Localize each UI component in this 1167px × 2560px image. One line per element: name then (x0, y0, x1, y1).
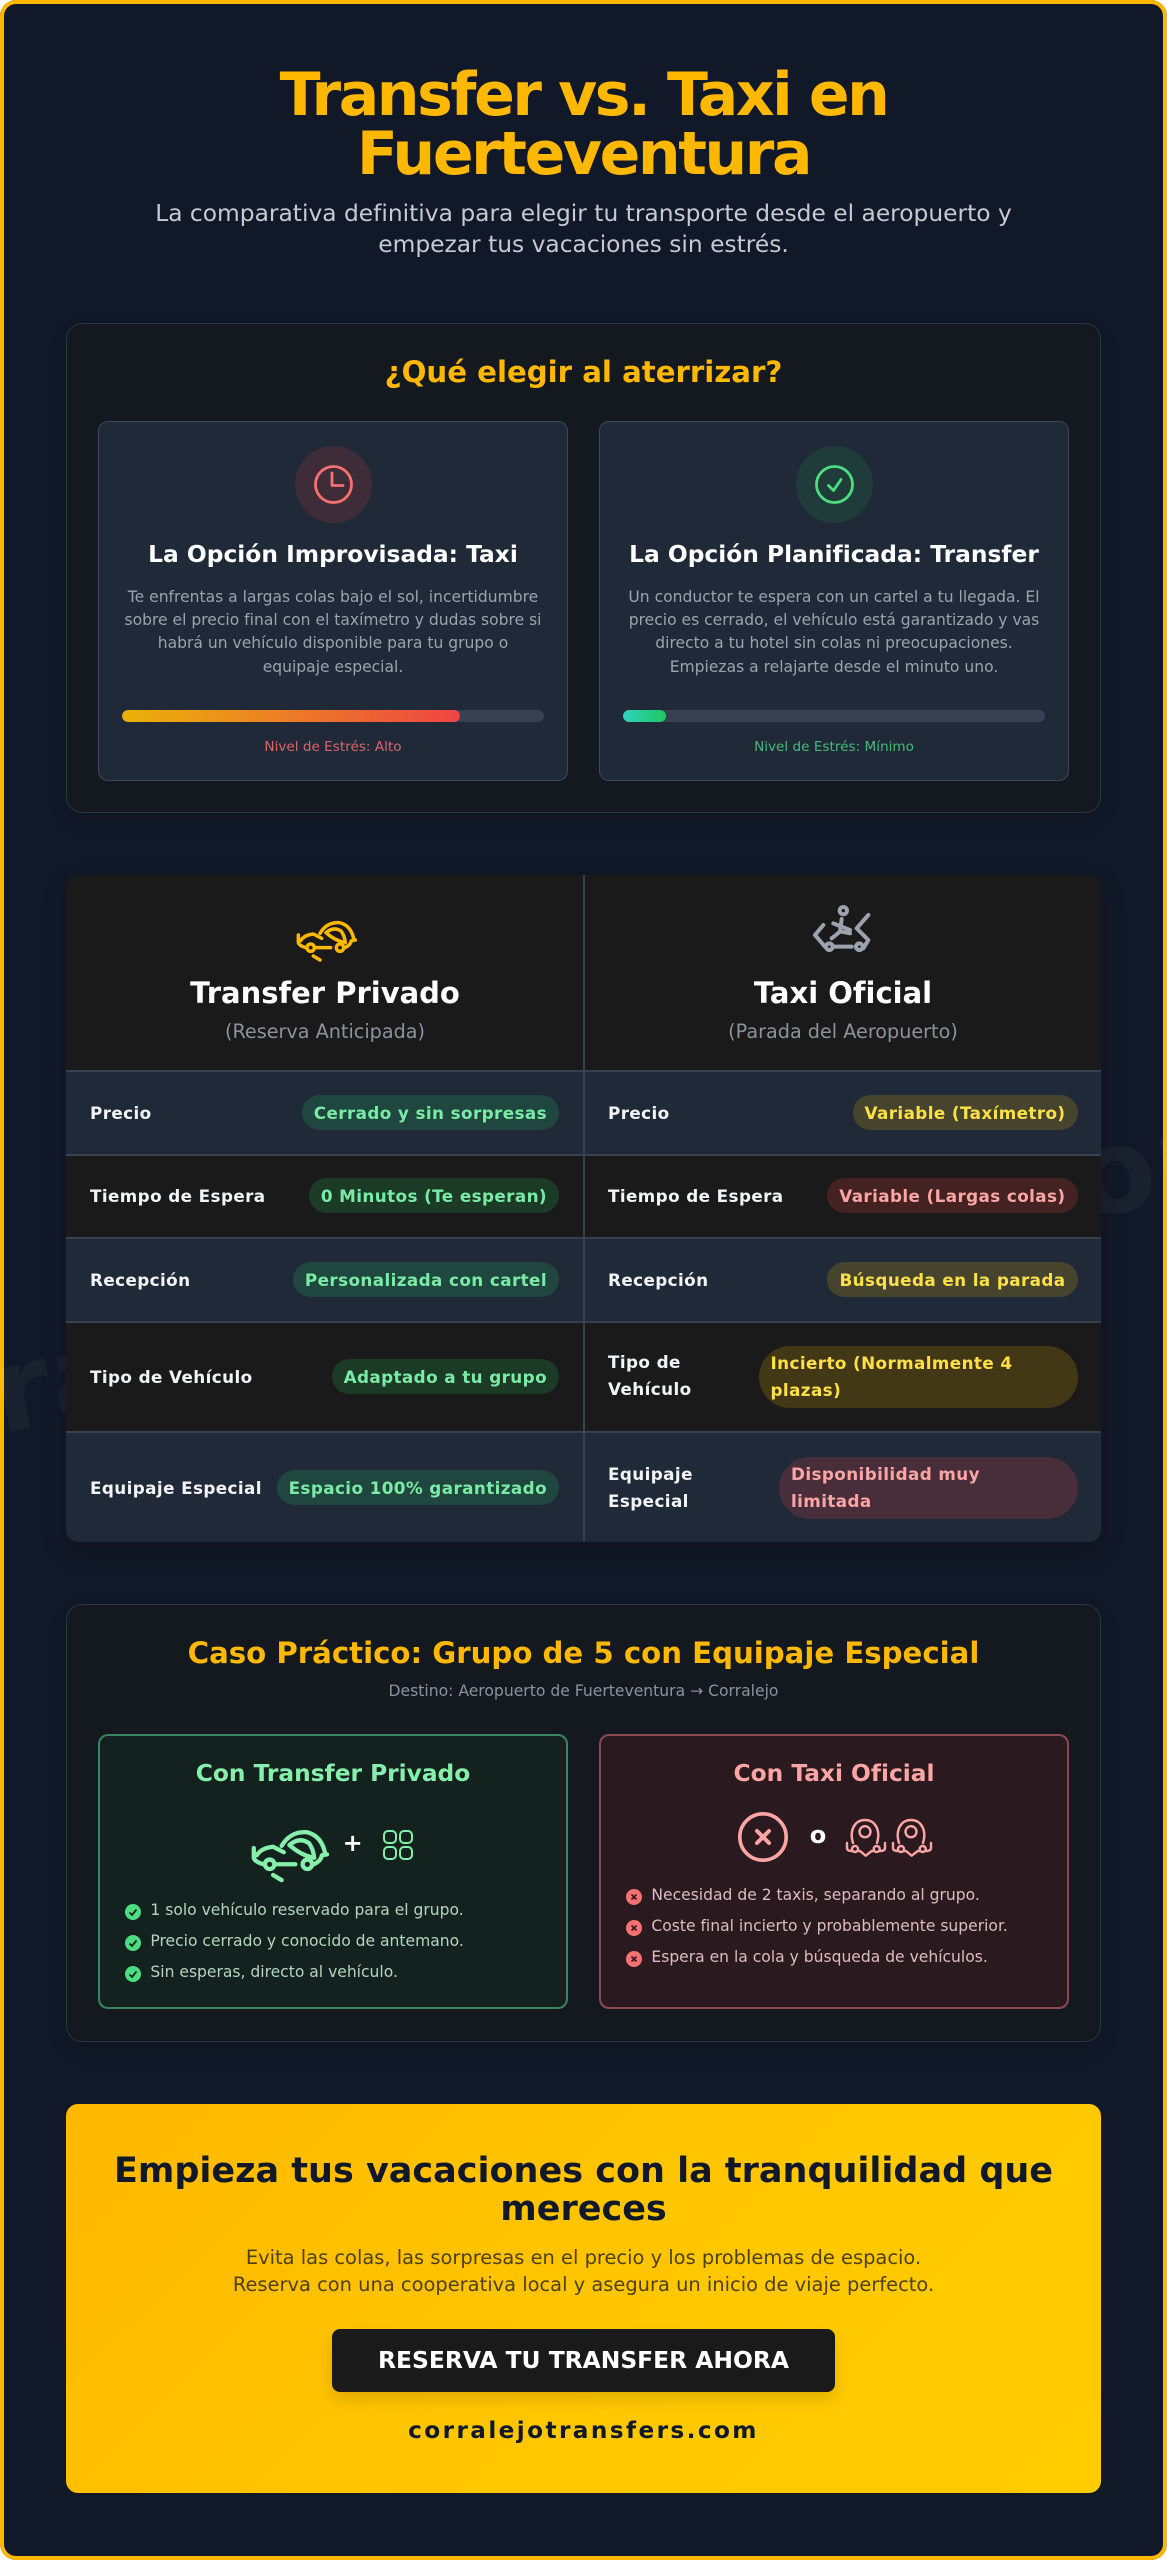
list item: Sin esperas, directo al vehículo. (150, 1963, 398, 1981)
row: tipo de vehiculo (66, 1321, 1101, 1431)
value: taxi: Disponibilidad muy (791, 1464, 980, 1484)
icon: car (252, 1830, 330, 1882)
value: transfer (309, 1178, 559, 1213)
cta text: Reserva con una cooperativa local y asegura un inicio de viaje perfecto. (233, 2273, 934, 2296)
website: corralejotransfers.com (408, 2417, 759, 2444)
title: Fuerteventura (357, 118, 810, 188)
panel: caso practico (66, 1604, 1101, 2042)
value: taxi: Variable (Taxímetro) (865, 1103, 1066, 1123)
icon: x circle (738, 1812, 788, 1862)
value: transfer: Adaptado a tu grupo (344, 1367, 547, 1387)
label: Tipo de Vehículo (90, 1367, 253, 1387)
card description: Te enfrentas a largas colas bajo el sol, incertidumbre (128, 588, 538, 606)
icon: clock (295, 446, 372, 523)
icon: taxi two (892, 1818, 932, 1857)
card description: sobre el precio final con el taxímetro y dudas sobre si (124, 611, 542, 629)
cta heading: mereces (500, 2189, 667, 2229)
value: transfer (293, 1262, 559, 1297)
card description: habrá un vehículo disponible para tu grupo o (158, 634, 508, 652)
icon: car (296, 920, 358, 962)
benefits list (125, 1901, 464, 1982)
value: transfer: Cerrado y sin sorpresas (314, 1103, 547, 1123)
value: taxi (827, 1178, 1078, 1213)
card description: directo a tu hotel sin colas ni preocupaciones. (655, 634, 1013, 652)
value: taxi (853, 1095, 1078, 1130)
separator: o: o (810, 1821, 826, 1849)
card description (124, 588, 542, 676)
card: transfer planned option (599, 421, 1069, 781)
comparison table (66, 875, 1101, 1542)
stress bar high (122, 710, 544, 722)
label: Equipaje Especial (90, 1478, 262, 1498)
label: Tipo de (608, 1352, 681, 1372)
card: con transfer privado (98, 1734, 568, 2009)
subtitle: empezar tus vacaciones sin estrés. (378, 230, 789, 258)
cta text (233, 2246, 934, 2296)
column header: taxi oficial (728, 905, 958, 1043)
card title: La Opción Improvisada: Taxi (148, 540, 518, 568)
label: Vehículo (608, 1379, 692, 1399)
label: Precio (90, 1103, 152, 1123)
label: Especial (608, 1491, 689, 1511)
value: transfer: 0 Minutos (Te esperan) (321, 1186, 547, 1206)
card title: Con Transfer Privado (196, 1760, 470, 1787)
drawbacks list (626, 1886, 1008, 1967)
subtitle: La comparativa definitiva para elegir tu transporte desde el aeropuerto y (155, 199, 1012, 227)
heading: que elegir: ¿Qué elegir al aterrizar? (385, 355, 782, 389)
row: precio (66, 1070, 1101, 1154)
column subtitle: (Reserva Anticipada) (225, 1020, 425, 1043)
plus sign: + (343, 1829, 363, 1857)
icon: luggage grid (383, 1830, 413, 1860)
label (608, 1464, 693, 1511)
route subtitle: Destino: Aeropuerto de Fuerteventura → Corralejo (389, 1682, 778, 1700)
card: taxi improvised option (98, 421, 568, 781)
label: Precio (608, 1103, 670, 1123)
value: transfer: Personalizada con cartel (305, 1270, 547, 1290)
label (608, 1352, 692, 1399)
value: transfer (332, 1359, 559, 1394)
value: taxi: Búsqueda en la parada (839, 1270, 1066, 1290)
button: reserva (332, 2329, 835, 2392)
column header: transfer privado (190, 920, 460, 1043)
card description: equipaje especial. (263, 658, 403, 676)
label: Tiempo de Espera (608, 1186, 784, 1206)
value: taxi: Incierto (Normalmente 4 (770, 1353, 1012, 1373)
value: taxi (827, 1262, 1078, 1297)
cta text: Evita las colas, las sorpresas en el precio y los problemas de espacio. (246, 2246, 921, 2268)
cta heading: Empieza tus vacaciones con la tranquilidad que (114, 2151, 1053, 2191)
value: transfer (277, 1470, 559, 1505)
subtitle (155, 199, 1012, 258)
stress label: Nivel de Estrés: Alto (264, 739, 402, 755)
value: taxi: plazas) (770, 1380, 841, 1400)
icon: taxi (813, 905, 870, 952)
card description: Un conductor te espera con un cartel a tu llegada. El (628, 588, 1040, 606)
title: Transfer vs. Taxi en (280, 60, 887, 130)
row: tiempo de espera (66, 1154, 1101, 1237)
stress bar low (623, 710, 1045, 722)
value: transfer (302, 1095, 559, 1130)
label: Tiempo de Espera (90, 1186, 266, 1206)
card: con taxi oficial (599, 1734, 1069, 2009)
label: Equipaje (608, 1464, 693, 1484)
panel: que elegir al aterrizar (66, 323, 1101, 813)
value: transfer: Espacio 100% garantizado (289, 1478, 547, 1498)
column subtitle: (Parada del Aeropuerto) (728, 1020, 958, 1043)
value: taxi (779, 1457, 1078, 1519)
row: recepcion (66, 1237, 1101, 1321)
value: taxi (758, 1346, 1078, 1408)
icon: taxi one (846, 1818, 886, 1857)
row: equipaje especial (66, 1431, 1101, 1542)
label: Recepción (608, 1270, 708, 1290)
card title: Con Taxi Oficial (734, 1760, 934, 1787)
list item: Necesidad de 2 taxis, separando al grupo. (651, 1886, 980, 1904)
card description (628, 588, 1040, 676)
icon: check circle (796, 446, 873, 523)
list item: Espera en la cola y búsqueda de vehículos. (651, 1948, 988, 1966)
title (280, 60, 887, 188)
list item: Precio cerrado y conocido de antemano. (150, 1932, 464, 1950)
button: reserva: RESERVA TU TRANSFER AHORA (378, 2346, 789, 2374)
label: Recepción (90, 1270, 190, 1290)
column title: Taxi Oficial (754, 976, 932, 1010)
stress label: Nivel de Estrés: Mínimo (754, 739, 914, 755)
card description: Empiezas a relajarte desde el minuto uno. (670, 658, 998, 676)
list item: 1 solo vehículo reservado para el grupo. (150, 1901, 464, 1919)
heading: caso practico: Caso Práctico: Grupo de 5 con Equipaje Especial (188, 1636, 979, 1670)
list item: Coste final incierto y probablemente superior. (651, 1917, 1008, 1935)
card title: La Opción Planificada: Transfer (629, 540, 1039, 568)
value: taxi: Variable (Largas colas) (839, 1186, 1066, 1206)
cta heading (114, 2151, 1053, 2229)
column title: Transfer Privado (190, 976, 460, 1010)
call to action panel (66, 2104, 1101, 2493)
value: taxi: limitada (791, 1491, 872, 1511)
card description: precio es cerrado, el vehículo está garantizado y vas (629, 611, 1039, 629)
